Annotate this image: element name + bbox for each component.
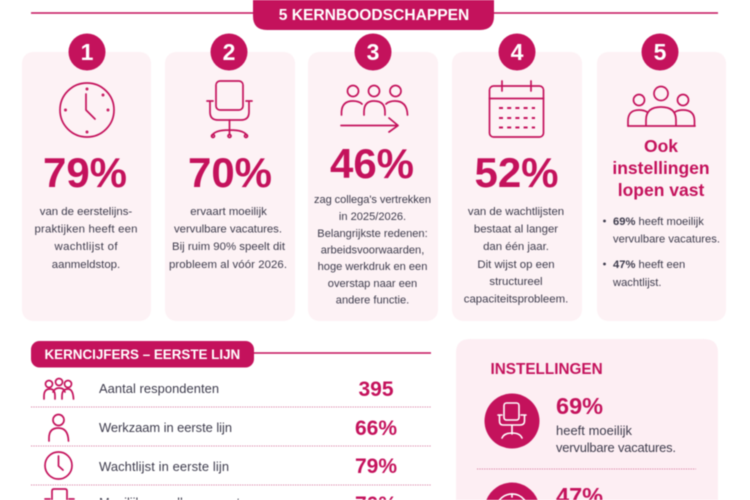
panel: card 4 duur wachtlijst: 52% xyxy=(474,149,559,196)
panel: card 4 duur wachtlijst xyxy=(452,34,582,321)
text: bullets: 47% heeft een xyxy=(613,259,685,271)
row: aantal respondenten xyxy=(44,378,394,401)
panel: instellingen: INSTELLINGEN xyxy=(490,361,603,378)
text: card 1 description xyxy=(34,206,138,271)
text: card 2 description xyxy=(169,206,287,271)
text: card 1 description: van de eerstelijns- xyxy=(40,206,132,218)
item: 69% vacatures: 69% xyxy=(556,393,603,419)
panel: card 2 vacatures xyxy=(165,34,295,321)
heading: ook instellingen lopen vast xyxy=(612,136,710,200)
text: card 4 description: dan één jaar. xyxy=(483,241,549,253)
heading: ook instellingen lopen vast: instellingen xyxy=(612,158,710,178)
text: bullets: 69% heeft moeilijk xyxy=(613,216,704,228)
text: card 4 description: bestaat al langer xyxy=(474,224,558,236)
panel: card 1 wachtlijst: 79% xyxy=(43,149,127,196)
heading: kerncijfers: KERNCIJFERS – EERSTE LIJN xyxy=(44,347,240,362)
text: card 3 description: andere functie. xyxy=(336,294,409,306)
text: card 3 description: in 2025/2026. xyxy=(339,211,406,223)
heading: ook instellingen lopen vast: Ook xyxy=(644,136,678,156)
panel: card 4 duur wachtlijst: 4 xyxy=(511,39,524,65)
heading: kerncijfers xyxy=(31,341,431,368)
text: card 4 description: Dit wijst op een xyxy=(477,259,555,271)
panel: card 5 instellingen xyxy=(597,34,726,321)
text: card 4 description: capaciteitsprobleem. xyxy=(464,294,568,306)
text: card 2 description: ervaart moeilijk xyxy=(190,206,267,218)
item: 47% wachtlijst xyxy=(486,483,603,500)
text: card 2 description: vervulbare vacatures. xyxy=(174,224,282,236)
header: 5 kernboodschappen: 5 KERNBOODSCHAPPEN xyxy=(279,7,469,24)
item: 69% vacatures: heeft moeilijk xyxy=(556,423,633,438)
text: card 2 description: probleem al vóór 2026. xyxy=(169,259,287,271)
text: card 3 description: zag collega's vertrekken xyxy=(314,194,431,206)
text: bullets: wachtlijst. xyxy=(612,277,662,289)
panel: card 2 vacatures: 2 xyxy=(223,39,235,65)
icon: group of people xyxy=(628,86,695,126)
icon: office chair xyxy=(207,81,252,138)
section: kerncijfers eerste lijn xyxy=(31,341,431,500)
row: wachtlijst in eerste lijn: Wachtlijst in eerste lijn xyxy=(99,459,229,474)
header: 5 kernboodschappen xyxy=(31,0,718,30)
panel: card 3 vertrek: 46% xyxy=(330,140,414,187)
panel: instellingen xyxy=(456,339,718,500)
text: card 3 description: Belangrijkste redenen: xyxy=(317,228,428,240)
panel: card 1 wachtlijst xyxy=(22,34,151,321)
text: card 1 description: praktijken heeft een xyxy=(34,224,138,236)
text: card 3 description: hoge werkdruk en een xyxy=(318,261,427,273)
row: wachtlijst in eerste lijn xyxy=(45,452,397,479)
row: werkzaam in eerste lijn: 66% xyxy=(355,417,397,440)
panel: card 2 vacatures: 70% xyxy=(188,149,272,196)
row: werkzaam in eerste lijn xyxy=(49,414,397,441)
text: card 4 description: structureel xyxy=(489,276,543,288)
text: card 1 description: wachtlijst of xyxy=(54,241,118,253)
text: bullets: vervulbare vacatures. xyxy=(613,234,720,246)
item: 69% vacatures xyxy=(484,393,676,455)
text: card 2 description: Bij ruim 90% speelt dit xyxy=(172,241,286,253)
icon: clock xyxy=(60,83,114,137)
panel: card 1 wachtlijst: 1 xyxy=(81,39,94,65)
text: card 4 description xyxy=(464,206,568,306)
panel: card 3 vertrek xyxy=(308,34,438,321)
text: card 4 description: van de wachtlijsten xyxy=(468,206,564,218)
icon: people leaving with arrow xyxy=(341,86,408,132)
text: card 3 description: arbeidsvoorwaarden, xyxy=(321,244,424,256)
icon: calendar xyxy=(490,81,544,137)
row: moeilijk vervulbare vacatures xyxy=(45,489,397,500)
row: aantal respondenten: 395 xyxy=(358,378,394,401)
icon: white chair xyxy=(498,403,526,438)
text: card 1 description: aanmeldstop. xyxy=(52,259,120,271)
text: card 3 description xyxy=(314,194,431,306)
panel: card 5 instellingen: 5 xyxy=(654,39,667,65)
heading: ook instellingen lopen vast: lopen vast xyxy=(618,180,704,200)
item: 69% vacatures: vervulbare vacatures. xyxy=(556,440,676,455)
panel: card 3 vertrek: 3 xyxy=(367,39,379,65)
row: werkzaam in eerste lijn: Werkzaam in eerste lijn xyxy=(99,420,232,435)
text: bullets xyxy=(603,216,720,289)
text: card 3 description: overstap naar een xyxy=(328,278,417,290)
row: wachtlijst in eerste lijn: 79% xyxy=(355,455,397,478)
row: aantal respondenten: Aantal respondenten xyxy=(99,381,219,396)
